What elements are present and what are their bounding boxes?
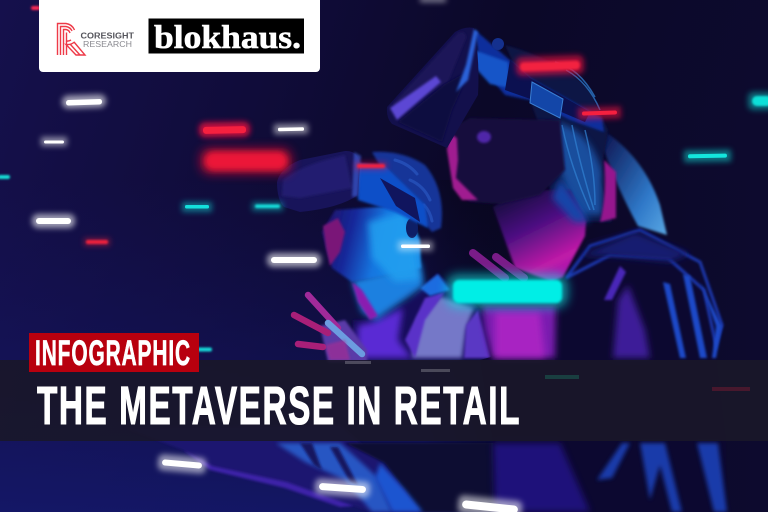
boy mouth [323,218,345,266]
cyan streak left edge [0,175,10,179]
boy headset visor shade [282,155,352,198]
boy palm [320,320,367,362]
icon: Coresight R mark [58,24,85,55]
logo: Coresight Research [58,24,134,55]
white streak 6 [398,241,433,251]
red streak top left [31,6,40,10]
woman headset visor top face [393,32,466,110]
red streak on headset [516,55,584,76]
boy headset strap dark band [380,178,420,222]
boy sleeve extended to lower left [125,425,425,512]
woman jacket [480,226,727,512]
large cyan streak [446,274,568,308]
boy face [322,205,421,282]
woman neck blue highlight [552,178,590,222]
white streak 2 [41,137,67,146]
palm pink heel [325,340,350,360]
jacket lower purple fold [493,443,590,512]
woman headset strap dark band [505,60,590,122]
woman lower hand [482,306,556,358]
woman face [448,118,565,204]
woman strap buckle [530,82,563,118]
large red streak [200,148,292,174]
text: CORESIGHT: CORESIGHT [80,31,134,40]
boy headset blue edge [352,152,361,197]
boy lit cheek [368,212,420,282]
sleeve purple rim [183,450,354,507]
woman hand bright centre [495,312,545,358]
logo card [39,0,320,72]
faint streaks seen through band [345,361,750,391]
woman blue strap block [470,50,510,88]
boy headset strap [358,163,428,228]
hair magenta strand [600,160,616,222]
text: RESEARCH: RESEARCH [83,40,132,49]
jacket lower blue folds [597,443,727,512]
red streak on hair [578,106,621,120]
white streak faint top [420,0,446,2]
woman headset blue edge [456,29,478,92]
sleeve dark folds [300,443,358,485]
hair light strands [556,122,602,215]
jacket shoulder highlight [566,230,722,345]
white streak 1 [62,94,106,109]
white streak low left [157,454,207,474]
boy ear [406,218,418,238]
label: INFOGRAPHIC [29,333,199,373]
cyan streak 3 [252,202,283,211]
hoodie lit purple chest [356,308,412,358]
hair strand texture [555,62,600,210]
white streak low centre [315,478,370,498]
second sleeve lavender [464,310,490,358]
boy hand raised [294,295,367,362]
jacket shoulder glow [580,232,690,262]
woman neck [493,190,586,282]
boy hoodie and torso [352,273,490,360]
boy hair texture [395,160,432,221]
white streak bottom [457,495,523,512]
hoodie purple shoulder fold [405,292,445,358]
logo: blokhaus: blokhaus. [154,20,301,56]
woman headset top button [492,38,504,50]
white streak 3 [274,124,308,134]
boy curly hair [372,152,442,232]
woman upper hand fingers [473,253,524,278]
jacket sleeve stripes [604,266,626,300]
woman headset visor [387,28,478,148]
dark body base below band [345,443,495,512]
woman headset visor purple lights [390,76,441,120]
boy headset visor [277,151,360,212]
woman face magenta rim [447,133,478,200]
woman cheek glow [477,131,491,143]
woman headset lower side [398,70,470,142]
red streak on boy headset [355,162,387,170]
jacket blue stripes [663,274,722,358]
white streak 5 [267,253,321,267]
cyan streak beside label [197,348,212,352]
cyan streak far right [748,92,768,110]
photo: boy wearing VR headset [125,151,495,512]
red streak 1 [199,122,250,137]
label: INFOGRAPHIC: INFOGRAPHIC [35,334,191,373]
hoodie lavender highlight [412,296,474,358]
boy neck [352,262,424,320]
white streak 4 [32,214,75,228]
hoodie blue shoulder [420,274,450,296]
woman hair [505,45,612,222]
photo: woman wearing VR headset [387,28,727,512]
cyan streak 2 [182,202,212,212]
dark title band [0,360,768,441]
sleeve blue highlights [276,443,392,512]
woman ponytail [604,133,667,235]
woman headset strap [475,30,604,132]
jacket purple panel [613,285,650,358]
boy fingers [294,295,362,354]
blue arm at lower centre [375,463,423,512]
cyan streak right [684,150,731,162]
boy neck pink edge [352,282,378,320]
red streak small [84,238,110,246]
